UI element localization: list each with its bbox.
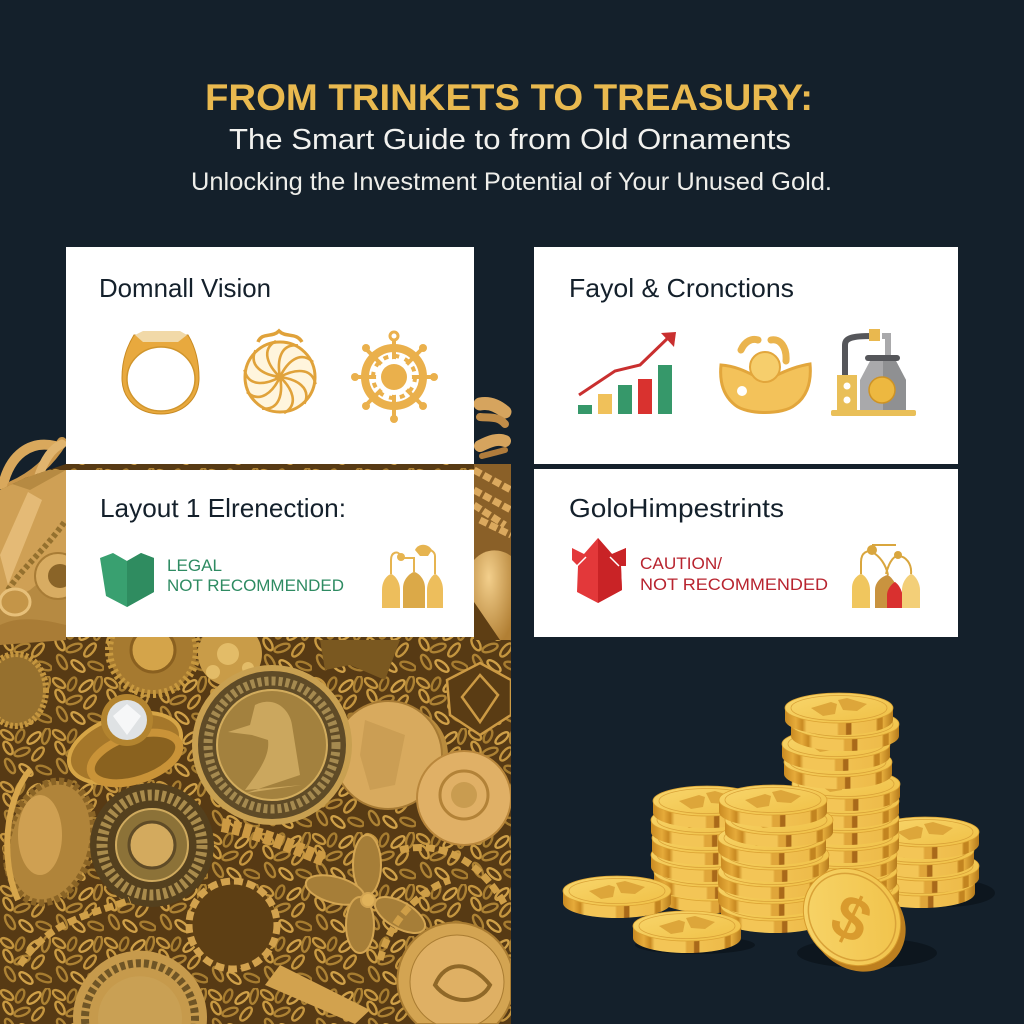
loose coin front [633, 911, 741, 953]
curved arc [7, 770, 30, 900]
portrait medallion [192, 665, 352, 825]
icon: refinery still [831, 329, 916, 416]
caution label [640, 554, 828, 594]
right stack [866, 817, 979, 908]
title block [191, 77, 832, 196]
bracelet [222, 825, 325, 860]
heading: Domnall Vision [99, 273, 271, 303]
panel: top right [534, 247, 958, 464]
tagline: Unlocking the Investment Potential of Your Unused Gold. [191, 168, 832, 196]
chains [20, 847, 505, 965]
bottom coin [73, 951, 207, 1024]
crest coin [397, 923, 511, 1024]
heading: Layout 1 Elrenection: [100, 493, 346, 523]
filigree flower [303, 835, 431, 953]
diamond ring [66, 694, 184, 788]
icon: growth chart [578, 332, 676, 414]
icon: red shield [572, 538, 626, 603]
star ornament [320, 640, 400, 680]
icon: gold and red bells [852, 545, 920, 608]
loose coin left [563, 876, 671, 918]
icon: gold bells [382, 545, 443, 608]
panel: top left [66, 247, 474, 464]
icon: gold ingot [721, 339, 810, 412]
leaning dollar coin: $ [821, 881, 881, 958]
caution label: NOT RECOMMENDED [640, 575, 828, 594]
pale coin pair [334, 701, 448, 809]
chains above the pile [3, 403, 505, 486]
upper left sliver ornaments [0, 470, 66, 645]
leaning dollar coin [783, 848, 926, 992]
left ring piece [0, 654, 46, 726]
middle stack [718, 785, 833, 933]
left stack [651, 786, 766, 913]
subtitle: The Smart Guide to from Old Ornaments [229, 124, 791, 156]
bar clasp [265, 965, 370, 1024]
gold jewellery pile [0, 464, 512, 1024]
chain circle [189, 881, 277, 969]
studded ornament [198, 637, 262, 684]
title: FROM TRINKETS TO TREASURY: [205, 77, 813, 118]
panel: bottom right [534, 469, 958, 637]
tall stack [782, 693, 900, 915]
icon: swirl pendant [242, 331, 318, 415]
upper right sliver ornaments [474, 464, 512, 640]
ornate disc [90, 783, 214, 907]
coin stacks [563, 693, 995, 992]
icon: gold ring [122, 331, 199, 414]
cage ornament [447, 663, 511, 735]
caution label: CAUTION/ [640, 554, 722, 573]
legal label [167, 556, 344, 595]
icon: sun wheel [351, 332, 438, 423]
legal label: LEGAL [167, 556, 222, 575]
heading: GoloHimpestrints [569, 493, 784, 523]
sunburst [105, 637, 200, 698]
legal label: NOT RECOMMENDED [167, 576, 344, 595]
icon: green shield [100, 553, 154, 607]
brooch [2, 778, 96, 906]
pale coin right [417, 751, 511, 845]
panel: bottom left [66, 470, 474, 637]
heading: Fayol & Cronctions [569, 273, 794, 303]
shadows [895, 879, 995, 907]
